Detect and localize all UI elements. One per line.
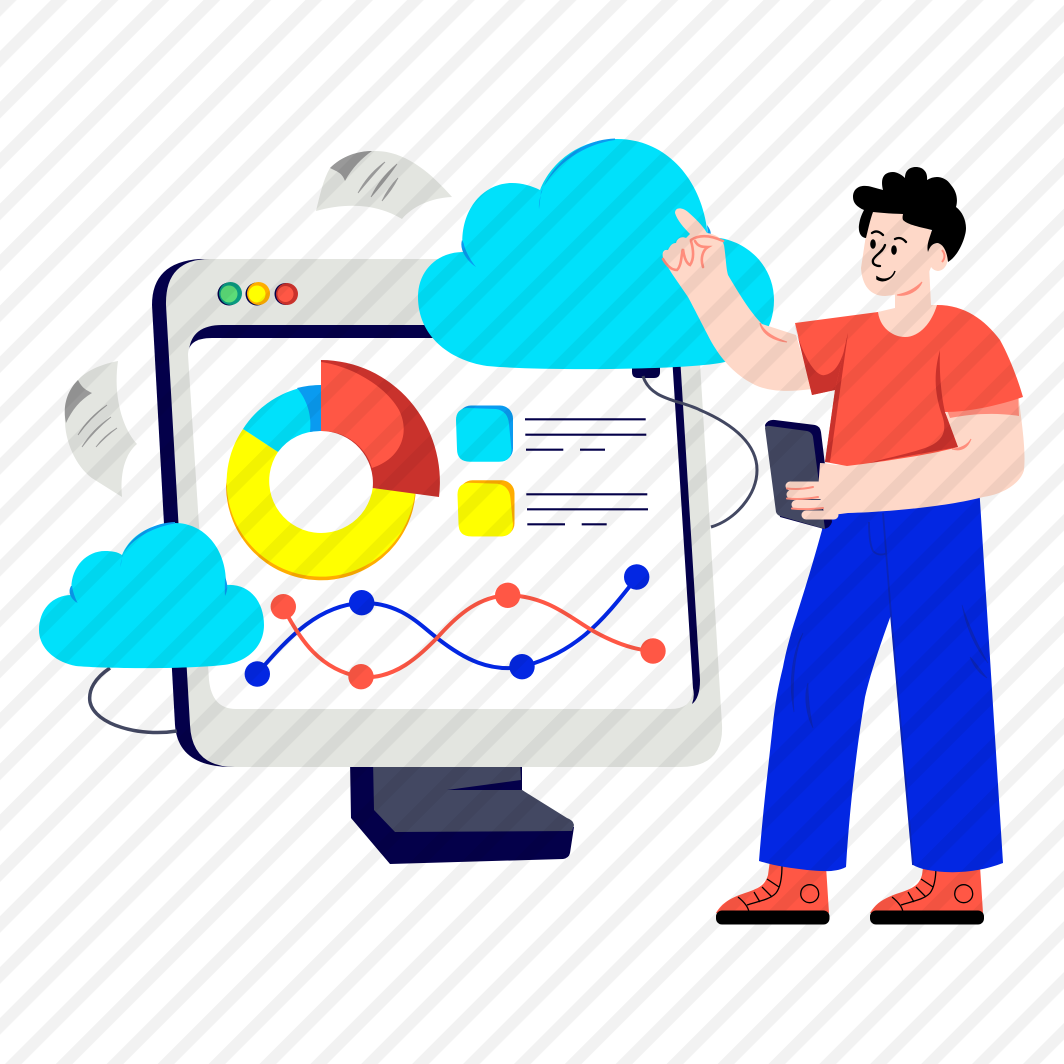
neck shadow [897, 282, 922, 295]
monitor stand [350, 760, 574, 864]
raised arm and pointing hand [663, 208, 812, 391]
person [663, 167, 1025, 924]
monitor back edge [152, 259, 300, 767]
paper sheet: top [316, 151, 452, 219]
cyan segment [243, 385, 321, 452]
large cloud [418, 138, 774, 369]
monitor [152, 259, 722, 767]
ear [928, 243, 948, 271]
lower arm and hand holding phone [787, 392, 1025, 516]
monitor screen [188, 338, 693, 709]
legend row: yellow [458, 480, 648, 536]
blue segment [297, 385, 321, 432]
legend lines [525, 419, 646, 450]
facial features [870, 231, 906, 281]
legend lines [526, 494, 648, 524]
yellow segment shadow [226, 470, 416, 580]
window button: green [218, 282, 242, 306]
window button: red [274, 283, 298, 305]
hair [853, 167, 966, 262]
cable: large cloud [632, 366, 757, 527]
monitor right inner edge [671, 340, 700, 704]
t-shirt [795, 305, 1023, 466]
blue series [245, 564, 649, 687]
shoes [716, 860, 984, 924]
yellow swatch [458, 480, 514, 536]
red series [271, 583, 666, 689]
monitor screen top bar [189, 325, 674, 350]
right shoe [870, 860, 984, 924]
small cloud [39, 522, 264, 668]
head [853, 167, 966, 296]
trousers [759, 485, 1003, 872]
cable: small cloud [90, 668, 177, 733]
red segment highlight [321, 362, 404, 468]
neck [878, 265, 937, 337]
paper sheet: left [65, 361, 137, 497]
arm crease [952, 439, 971, 450]
face [861, 210, 935, 296]
yellow segment [227, 429, 415, 577]
monitor body [166, 259, 722, 767]
red segment [321, 360, 440, 497]
legend row: cyan [456, 406, 646, 462]
cyan swatch [456, 406, 513, 462]
line chart [245, 564, 666, 689]
left shoe [716, 860, 830, 924]
window button: yellow [246, 282, 270, 306]
donut chart [226, 360, 440, 580]
phone [765, 420, 832, 529]
